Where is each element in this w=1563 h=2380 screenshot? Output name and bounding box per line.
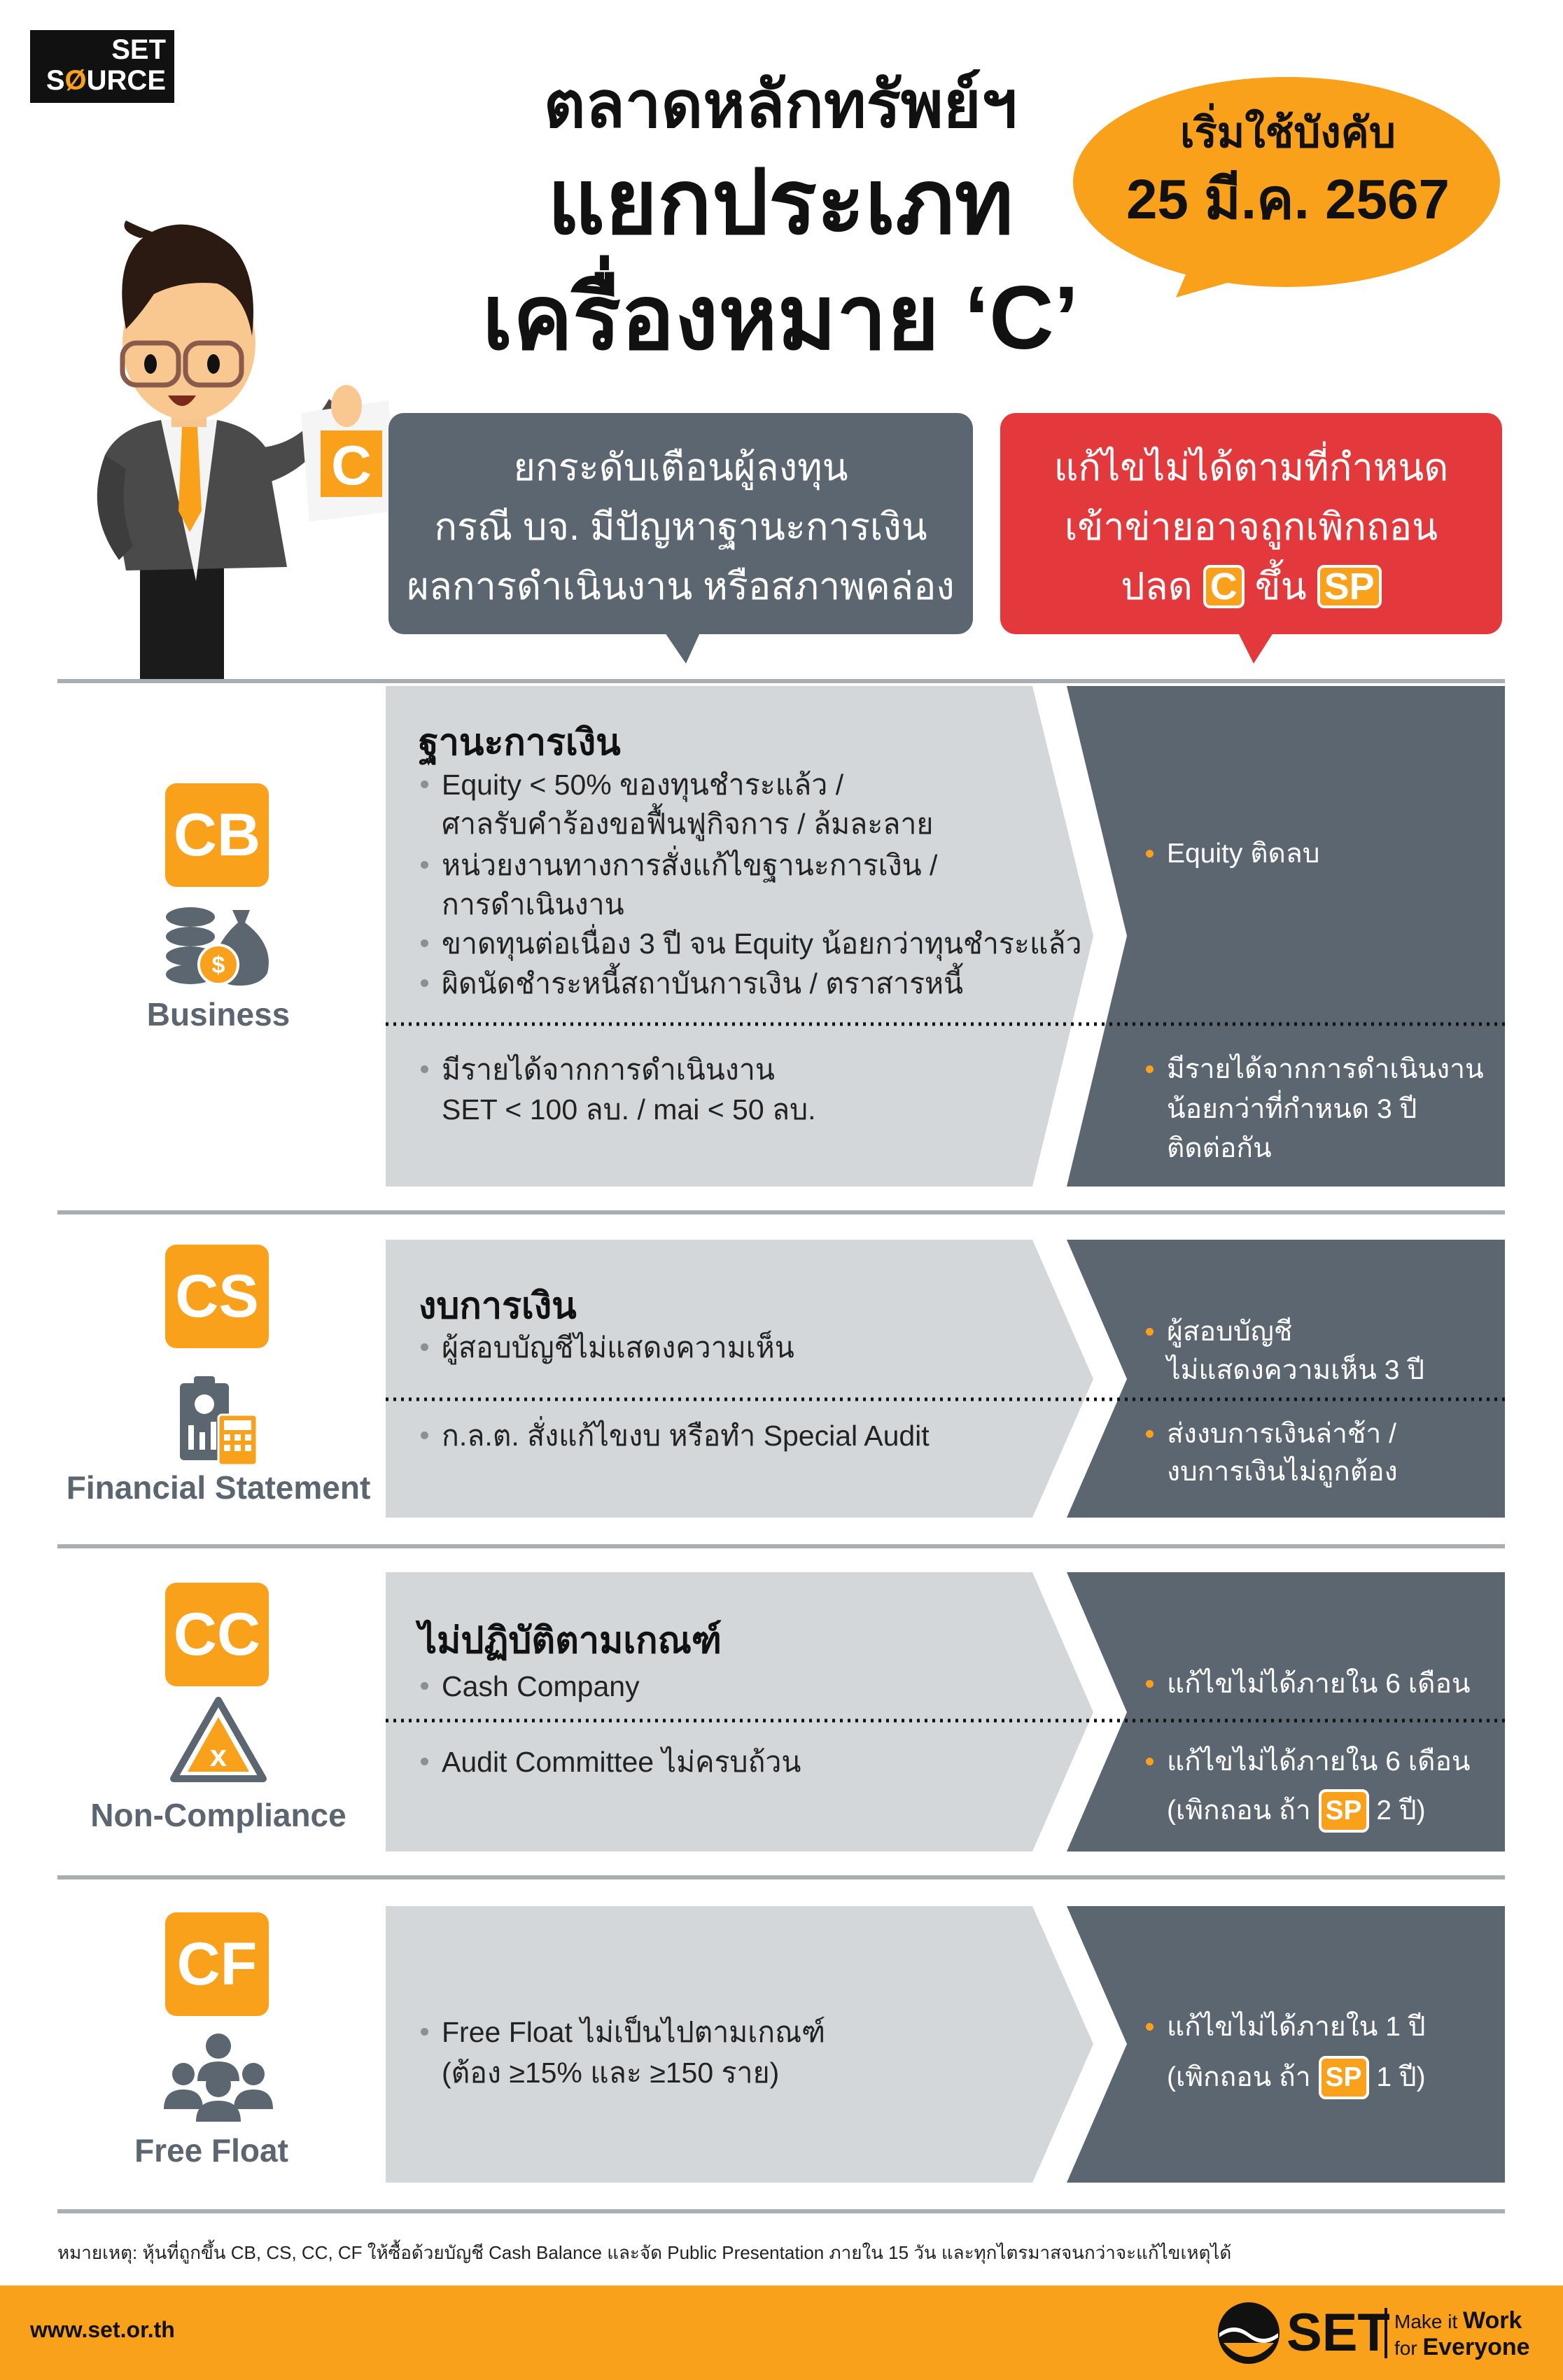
panel: grey header box: ผลการดำเนินงาน หรือสภาพคล่อง [407, 566, 955, 608]
icon: warning triangle: x [210, 1739, 227, 1773]
text: CC criteria: Cash Company [442, 1670, 640, 1702]
callout: start date bubble: 25 มี.ค. 2567 [1126, 168, 1450, 230]
section: CB: มีรายได้จากการดำเนินงาน [442, 1054, 775, 1086]
heading: financial position: ฐานะการเงิน [419, 722, 621, 763]
icon: group of people [164, 2033, 273, 2122]
badge: CC [165, 1583, 269, 1686]
section: CB: ติดต่อกัน [1167, 1133, 1272, 1163]
section: CC [90, 1583, 1471, 1833]
logo: SET SOURCE: SET [111, 34, 166, 65]
text: CS criteria: ผู้สอบบัญชีไม่แสดงความเห็น [442, 1331, 794, 1364]
illustration: businessman holding C card [97, 220, 391, 679]
section: CS: ส่งงบการเงินล่าช้า / [1167, 1419, 1396, 1449]
footer bar [0, 2286, 1563, 2380]
heading: financial statements: งบการเงิน [419, 1286, 577, 1326]
label: Free Float: Free Float [134, 2132, 288, 2169]
section: CC: Audit Committee ไม่ครบถ้วน [442, 1746, 801, 1778]
panel: red header box: แก้ไขไม่ได้ตามที่กำหนด [1054, 447, 1448, 489]
section: CS: ก.ล.ต. สั่งแก้ไขงบ หรือทำ Special Audit [442, 1420, 930, 1452]
text: CS delisting conditions: ผู้สอบบัญชี [1167, 1317, 1292, 1347]
panel: red header box [1000, 413, 1502, 664]
badge: CF: CF [177, 1931, 257, 1998]
logo: SET: Make it Work [1394, 2307, 1522, 2334]
section: CB: ขาดทุนต่อเนื่อง 3 ปี จน Equity น้อยกว่าทุนชำระแล้ว [442, 927, 1082, 960]
panel: red header box: SP [1324, 566, 1375, 608]
section: CB: หน่วยงานทางการสั่งแก้ไขฐานะการเงิน / [442, 849, 937, 881]
icon: coins and money bag [166, 907, 269, 986]
section: CB: การดำเนินงาน [442, 888, 624, 920]
section: CS: ไม่แสดงความเห็น 3 ปี [1167, 1355, 1424, 1385]
panel: red header box: C [1210, 566, 1238, 608]
section: CB: มีรายได้จากการดำเนินงาน [1167, 1054, 1484, 1084]
title: เครื่องหมาย ‘C’ [482, 268, 1079, 368]
text: CB delisting conditions: Equity ติดลบ [1167, 839, 1320, 869]
text: CB criteria: Equity < 50% ของทุนชำระแล้ว / [442, 769, 843, 801]
icon: warning triangle [170, 1697, 267, 1782]
text: CC delisting conditions: แก้ไขไม่ได้ภายใน 6 เดือน [1167, 1669, 1471, 1699]
section: CB: ผิดนัดชำระหนี้สถาบันการเงิน / ตราสารหนี้ [442, 967, 963, 1000]
badge: CB [165, 783, 269, 887]
logo: SET: for Everyone [1394, 2334, 1530, 2360]
section: CB: ศาลรับคำร้องขอฟื้นฟูกิจการ / ล้มละลาย [442, 808, 933, 840]
section: CC: (เพิกถอน ถ้า 2 ปี) [1167, 1795, 1426, 1826]
section: CS: งบการเงินไม่ถูกต้อง [1167, 1457, 1398, 1487]
label: Non-Compliance: Non-Compliance [90, 1797, 346, 1833]
badge: CC: CC [174, 1601, 260, 1668]
badge: CF [165, 1912, 269, 2016]
icon: coins and money bag: $ [212, 952, 225, 979]
logo: SET: SET [1287, 2303, 1390, 2362]
section: CF: (เพิกถอน ถ้า 1 ปี) [1167, 2062, 1426, 2092]
section: CF: (ต้อง ≥15% และ ≥150 ราย) [442, 2057, 779, 2089]
panel: grey header box [388, 413, 973, 664]
label: Financial Statement: Financial Statement [66, 1469, 370, 1506]
badge: CB: CB [174, 802, 260, 869]
section: CB: น้อยกว่าที่กำหนด 3 ปี [1167, 1094, 1417, 1124]
section: CB: SET < 100 ลบ. / mai < 50 ลบ. [442, 1093, 816, 1126]
callout: start date bubble [1073, 77, 1500, 298]
panel: grey header box: ยกระดับเตือนผู้ลงทุน [513, 447, 848, 489]
text: CF criteria: Free Float ไม่เป็นไปตามเกณฑ์ [442, 2016, 825, 2048]
panel: grey header box: กรณี บจ. มีปัญหาฐานะการเงิน [434, 506, 927, 548]
panel: red header box: เข้าข่ายอาจถูกเพิกถอน [1065, 506, 1438, 548]
label: Business: Business [147, 996, 290, 1032]
badge: CS [165, 1245, 269, 1348]
text: website: www.set.or.th [30, 2317, 175, 2342]
logo: SET SOURCE [30, 30, 174, 103]
badge: CS: CS [175, 1263, 259, 1330]
section: CF [134, 1912, 1426, 2169]
callout: start date bubble: เริ่มใช้บังคับ [1180, 109, 1396, 156]
icon: clipboard calculator [180, 1376, 256, 1464]
panel: red header box: ปลด ขึ้น [1121, 566, 1307, 608]
title: แยกประเภท [547, 153, 1014, 253]
section: CB [147, 722, 1484, 1163]
logo: SET [1218, 2302, 1530, 2364]
heading: non-compliance: ไม่ปฏิบัติตามเกณฑ์ [419, 1620, 722, 1661]
title: ตลาดหลักทรัพย์ฯ [544, 69, 1017, 141]
footnote: หมายเหตุ: หุ้นที่ถูกขึ้น CB, CS, CC, CF ให้ซื้อด้วยบัญชี Cash Balance และจัด Public Presentation ภายใน 15 วัน และทุกไตรมาสจนกว่าจะแก้ไขเหตุได้ [57, 2242, 1231, 2263]
section: CS [66, 1245, 1424, 1506]
logo: SET SOURCE: SØURCE [46, 65, 166, 96]
text: CF delisting conditions: แก้ไขไม่ได้ภายใน 1 ปี [1167, 2012, 1426, 2042]
section: CC: แก้ไขไม่ได้ภายใน 6 เดือน [1167, 1746, 1471, 1777]
section: CC: SP [1326, 1795, 1362, 1826]
title [482, 69, 1079, 368]
illustration: businessman holding C card: C [331, 434, 372, 496]
section: CF: SP [1326, 2062, 1362, 2092]
